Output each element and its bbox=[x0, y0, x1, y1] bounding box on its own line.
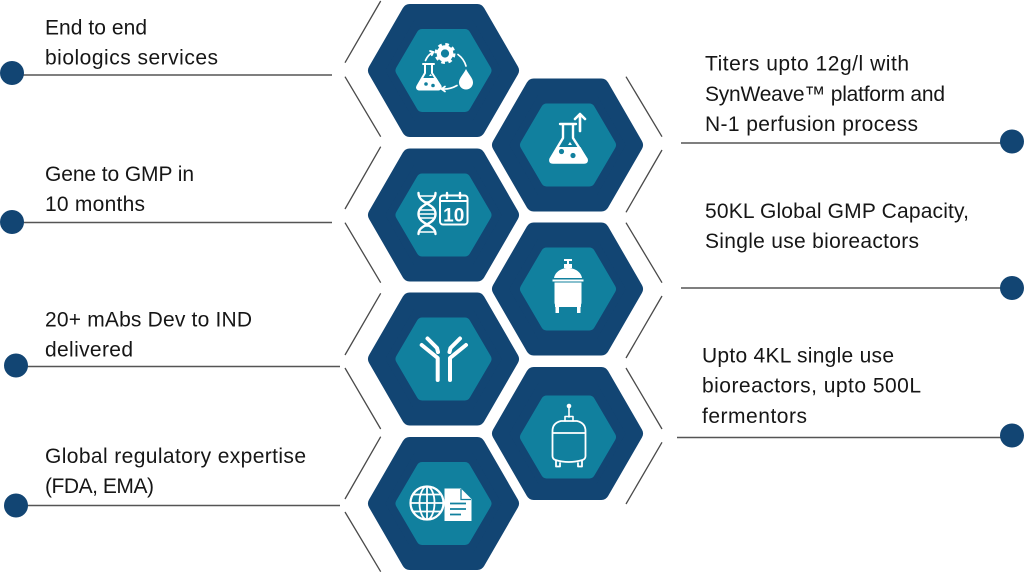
callout: regulatory expertise: (FDA, EMA) bbox=[45, 475, 154, 498]
callout: end to end biologics services: End to end bbox=[45, 16, 147, 40]
callout: global GMP capacity: 50KL Global GMP Capacity, bbox=[705, 200, 969, 223]
callout: titers bbox=[681, 52, 1024, 154]
hexagon: antibodies bbox=[376, 300, 511, 418]
icon: DNA and calendar: 10 bbox=[443, 206, 464, 226]
callout: mAbs delivered: 20+ mAbs Dev to IND bbox=[45, 308, 252, 332]
hexagon: single use bioreactor bbox=[500, 375, 635, 492]
hexagon: gene to GMP bbox=[376, 156, 511, 274]
callout: mAbs delivered bbox=[4, 308, 340, 378]
hexagon: regulatory expertise bbox=[376, 445, 511, 562]
icon: flask with up arrow bbox=[550, 114, 588, 163]
callout: titers: Titers upto 12g/l with bbox=[705, 52, 909, 76]
callout: end to end biologics services: biologics services bbox=[45, 46, 218, 70]
callout: gene to GMP: Gene to GMP in bbox=[45, 163, 194, 186]
hexagon: global GMP capacity bbox=[500, 230, 635, 348]
callout: mAbs delivered: delivered bbox=[45, 338, 133, 362]
callout: global GMP capacity bbox=[681, 200, 1024, 300]
callout: single use bioreactors and fermentors: bioreactors, upto 500L bbox=[702, 374, 921, 398]
callout: global GMP capacity: Single use bioreactors bbox=[705, 230, 919, 253]
callout: single use bioreactors and fermentors: Upto 4KL single use bbox=[702, 344, 894, 368]
callout: regulatory expertise bbox=[4, 445, 340, 518]
callout: gene to GMP: 10 months bbox=[45, 193, 145, 216]
callout: titers: N-1 perfusion process bbox=[705, 113, 918, 136]
hexagon: titers bbox=[500, 86, 635, 204]
callout: titers: SynWeave™ platform and bbox=[705, 83, 945, 106]
chevrons: right side bbox=[626, 77, 662, 504]
callout: end to end biologics services bbox=[0, 16, 332, 85]
callout: single use bioreactors and fermentors: fermentors bbox=[702, 405, 807, 428]
icon: globe and document bbox=[410, 486, 472, 521]
callout: gene to GMP bbox=[0, 163, 332, 234]
icon: flask, gear and droplet cycle bbox=[416, 44, 473, 92]
callout: single use bioreactors and fermentors bbox=[677, 344, 1024, 448]
hexagon: biologics services bbox=[376, 12, 511, 129]
icon: fermentor bbox=[552, 404, 586, 466]
callout: regulatory expertise: Global regulatory expertise bbox=[45, 445, 306, 468]
icon: antibody bbox=[422, 338, 466, 380]
chevrons: left side bbox=[345, 1, 381, 572]
icon: bioreactor bbox=[552, 259, 584, 313]
